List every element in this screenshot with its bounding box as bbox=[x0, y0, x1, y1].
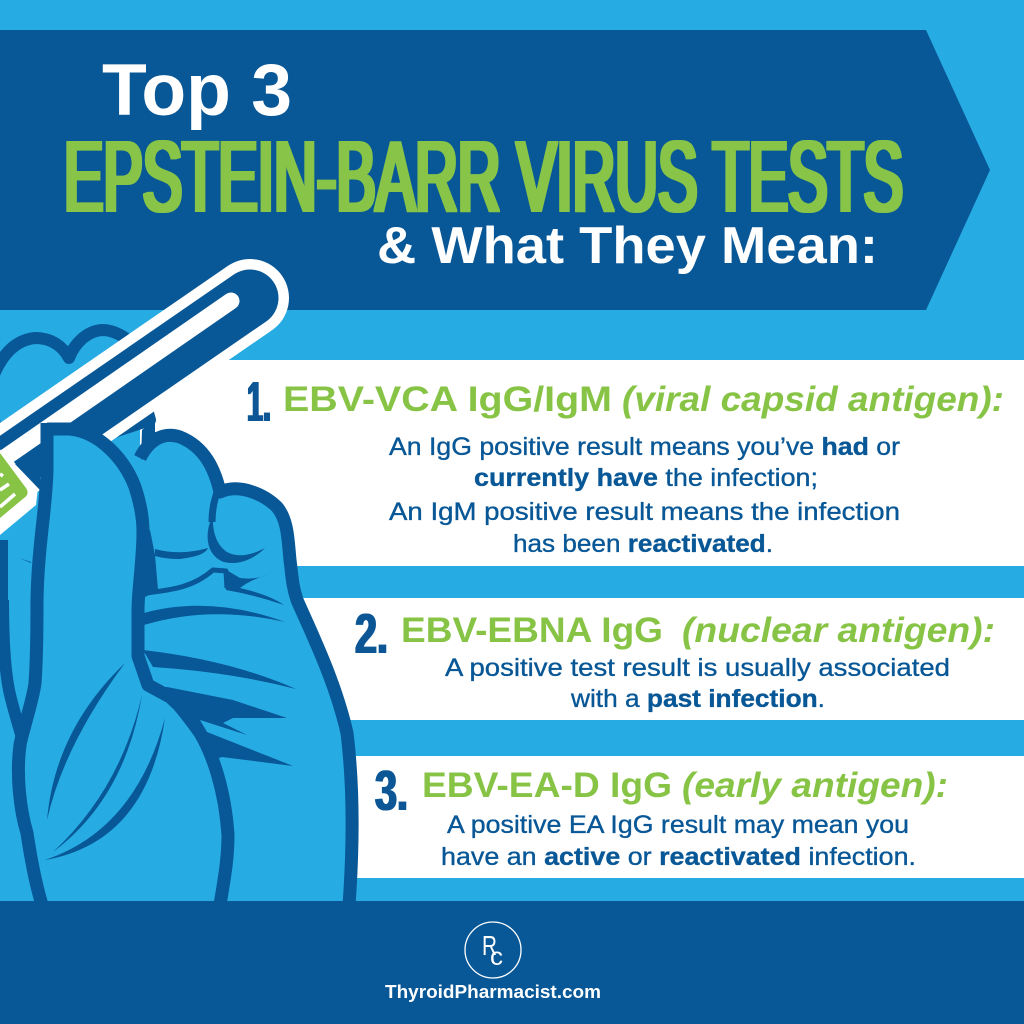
heading: test 2: EBV-EBNA IgG bbox=[401, 611, 663, 650]
heading: test 3: (early antigen): bbox=[682, 766, 948, 805]
test tube label bbox=[0, 445, 40, 535]
heading: test 2: (nuclear antigen): bbox=[682, 611, 995, 650]
text: test 2 description: with a past infection . bbox=[570, 685, 825, 713]
text: test 3 description: have an active or reactivated infection. bbox=[441, 843, 916, 871]
panel: test 2 background bbox=[140, 598, 1024, 720]
heading: test 1: EBV-VCA IgG/IgM bbox=[283, 380, 612, 419]
panel: test 3 background bbox=[140, 756, 1024, 878]
footer bar bbox=[0, 901, 1024, 1024]
text: test 2 description bbox=[445, 654, 950, 713]
text: test 1 description: has been reactivated. bbox=[513, 530, 773, 558]
footer website: ThyroidPharmacist.com bbox=[385, 982, 601, 1002]
heading: test 3: EBV-EA-D IgG bbox=[422, 766, 672, 805]
icon: hand holding test tube bbox=[0, 298, 352, 905]
heading: test 1: (viral capsid antigen): bbox=[622, 380, 1004, 419]
number 3: 3. bbox=[375, 759, 408, 823]
title bbox=[64, 50, 903, 275]
logo: RC monogram: c bbox=[490, 943, 503, 971]
text: test 1 description bbox=[389, 433, 900, 558]
palm creases bbox=[45, 606, 296, 860]
text: test 1 description: An IgG positive result means you’ve had or bbox=[389, 433, 900, 461]
text: test 1 description: currently have the infection; bbox=[474, 464, 818, 492]
text: test 2 description: A positive test result is usually associated bbox=[445, 654, 950, 682]
text: test 1 description: An IgM positive result means the infection bbox=[389, 498, 900, 526]
test tube bbox=[0, 298, 250, 491]
hand silhouette bbox=[20, 425, 352, 905]
back fingers bbox=[0, 330, 150, 470]
title: Top 3 bbox=[102, 50, 292, 131]
text: test 3 description: A positive EA IgG result may mean you bbox=[447, 811, 909, 839]
knuckle creases bbox=[147, 515, 284, 605]
number 2: 2. bbox=[355, 602, 388, 666]
number 1: 1. bbox=[247, 370, 271, 434]
panel: test 1 background bbox=[140, 360, 1024, 566]
title: & What They Mean: bbox=[377, 217, 878, 275]
text: test 3 description bbox=[441, 811, 916, 871]
logo: RC monogram: R bbox=[482, 930, 497, 961]
finger and palm outlines bbox=[3, 420, 352, 905]
banner arrow bbox=[0, 30, 990, 310]
logo: RC monogram bbox=[465, 922, 521, 978]
